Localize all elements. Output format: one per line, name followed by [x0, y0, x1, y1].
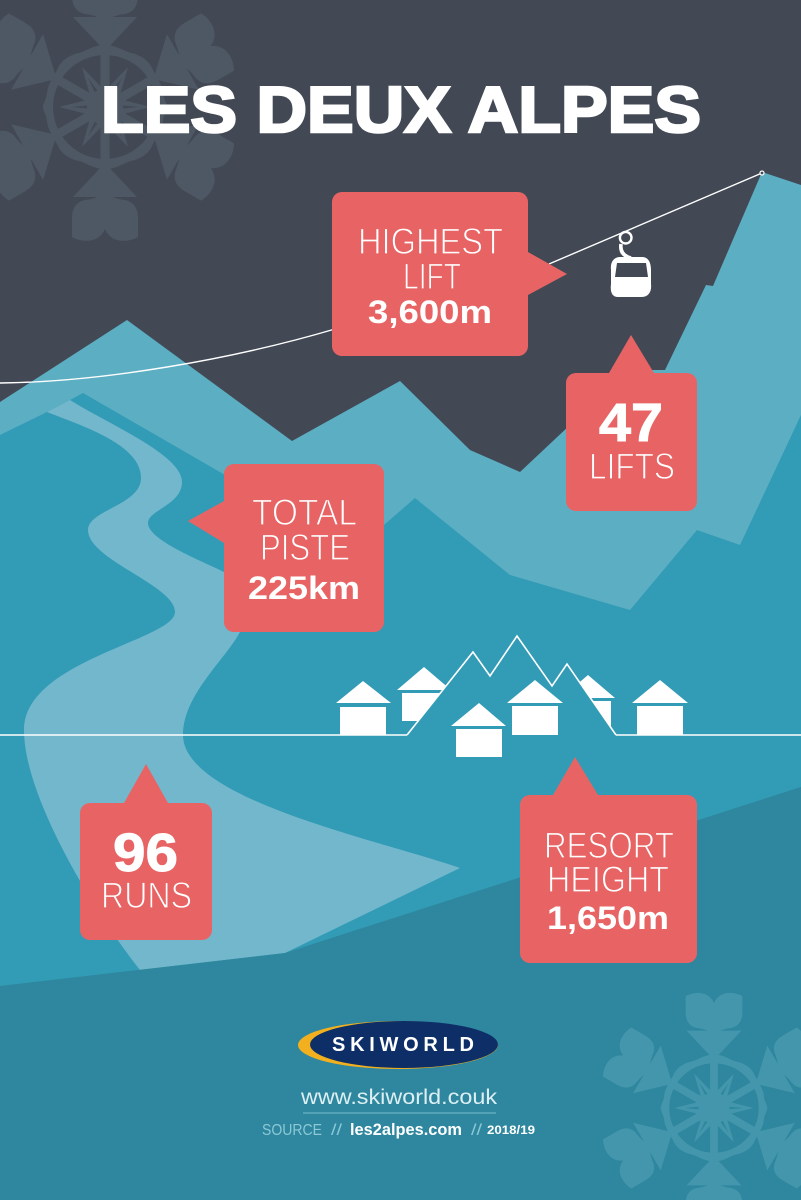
- light mountain range: [0, 172, 801, 640]
- source line: //: [471, 1122, 483, 1139]
- icon: snowflake top left: [0, 0, 237, 241]
- callout: runs: RUNS: [101, 875, 192, 916]
- callout: total piste: [188, 464, 384, 632]
- source line: [262, 1121, 535, 1139]
- callout: total piste: 225km: [248, 570, 360, 606]
- village scene: [0, 636, 801, 757]
- callout: resort height: 1,650m: [547, 900, 669, 936]
- callout: highest lift: HIGHEST: [358, 221, 503, 262]
- callout: resort height: [520, 757, 697, 963]
- ski piste: [24, 400, 460, 970]
- website url: www.skiworld.couk: [300, 1086, 498, 1109]
- source line: SOURCE: [262, 1122, 322, 1139]
- callout: highest lift: 3,600m: [368, 294, 492, 330]
- callout: resort height: RESORT: [544, 825, 674, 866]
- source line: les2alpes.com: [350, 1121, 462, 1139]
- callout: highest lift: [332, 192, 567, 356]
- house: far left: [336, 681, 391, 735]
- icon: snowflake bottom right: [600, 993, 801, 1200]
- callout: runs: [80, 764, 212, 940]
- house: far right: [632, 680, 688, 735]
- house: behind right: [561, 675, 615, 735]
- house: behind left: [397, 667, 451, 721]
- logo: Skiworld: [298, 1021, 498, 1069]
- source line: //: [331, 1122, 343, 1139]
- callout: lifts: LIFTS: [589, 446, 675, 487]
- source line: 2018/19: [487, 1123, 535, 1137]
- callout: resort height: HEIGHT: [547, 859, 669, 900]
- mid blue slope: [0, 393, 801, 1200]
- horizon line: [0, 734, 801, 736]
- icon: gondola: [611, 232, 651, 297]
- callout: total piste: PISTE: [260, 527, 350, 568]
- callout: lifts: 47: [599, 393, 663, 453]
- foreground dark slope: [0, 787, 801, 1200]
- house: front centre: [451, 703, 506, 757]
- village mountain outline: [407, 636, 616, 736]
- callout: highest lift: LIFT: [403, 256, 461, 297]
- callout: lifts: [566, 335, 697, 511]
- title: LES DEUX ALPES: [101, 73, 701, 146]
- callout: total piste: TOTAL: [252, 492, 357, 533]
- cable car line: [0, 171, 764, 383]
- callout: runs: 96: [113, 823, 178, 883]
- house: centre: [507, 680, 563, 735]
- logo: Skiworld: SKIWORLD: [332, 1034, 474, 1056]
